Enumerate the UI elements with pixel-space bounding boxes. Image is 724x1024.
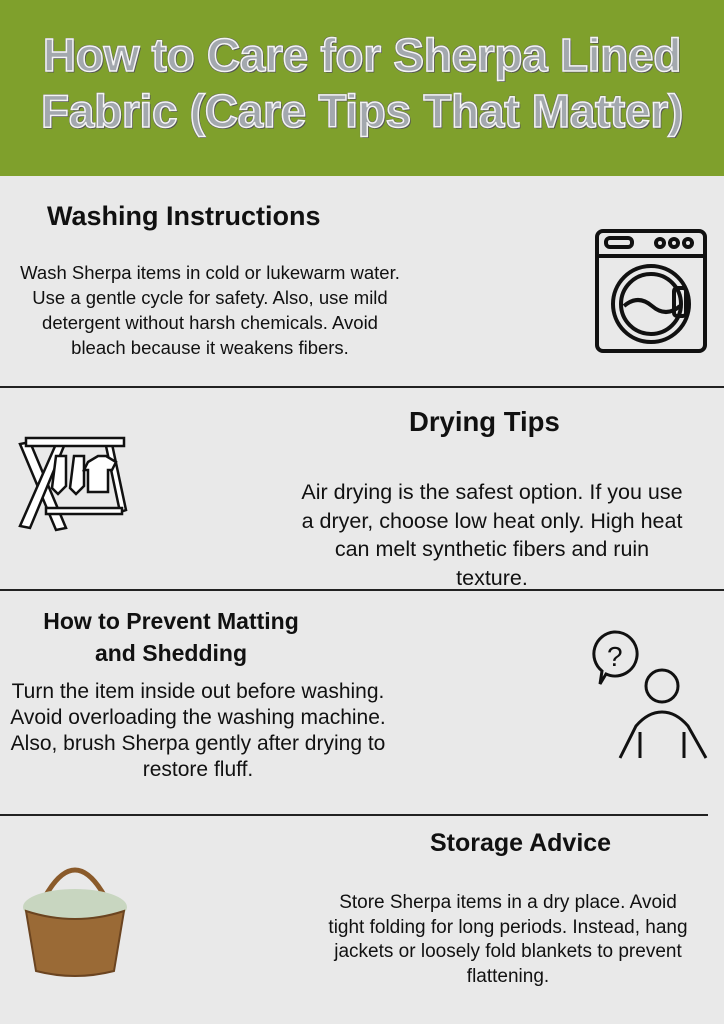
icon: washing machine [595,229,707,353]
icon: person with question [592,630,708,759]
text: washing: Use a gentle cycle for safety. Also, use mild [32,287,388,308]
text: storage: Store Sherpa items in a dry place. Avoid [339,892,677,913]
text: washing: detergent without harsh chemicals. Avoid [42,312,378,333]
icon: basket [23,868,127,977]
heading: matting: and Shedding [95,640,247,666]
heading: matting [43,608,299,666]
title: Fabric (Care Tips That Matter) [41,85,683,137]
text: washing [20,262,400,358]
text: matting: restore fluff. [143,758,253,781]
text: storage: jackets or loosely fold blankets to prevent [334,941,682,962]
text: washing: bleach because it weakens fibers. [71,337,349,358]
text: matting: Avoid overloading the washing machine. [10,706,386,729]
heading: storage: Storage Advice [430,829,611,857]
text: storage: tight folding for long periods. Instead, hang [328,916,688,938]
text: drying: a dryer, choose low heat only. High heat [302,508,682,532]
text: drying [301,480,683,590]
text: storage: flattening. [467,966,549,986]
text: storage [328,892,688,986]
icon: drying rack [18,436,128,532]
icon: person with question: ? [607,641,623,672]
title: How to Care for Sherpa Lined [43,29,681,81]
text: matting: Turn the item inside out before washing. [12,680,384,703]
text: drying: can melt synthetic fibers and ruin [335,537,649,561]
text: matting [10,680,386,781]
text: washing: Wash Sherpa items in cold or lukewarm water. [20,262,400,283]
heading: washing: Washing Instructions [47,201,321,231]
text: drying: texture. [456,566,528,590]
text: matting: Also, brush Sherpa gently after drying to [11,732,385,755]
header banner [0,0,724,176]
heading: drying: Drying Tips [409,406,560,437]
heading: matting: How to Prevent Matting [43,608,299,634]
text: drying: Air drying is the safest option. If you use [301,480,683,504]
title [41,29,683,138]
